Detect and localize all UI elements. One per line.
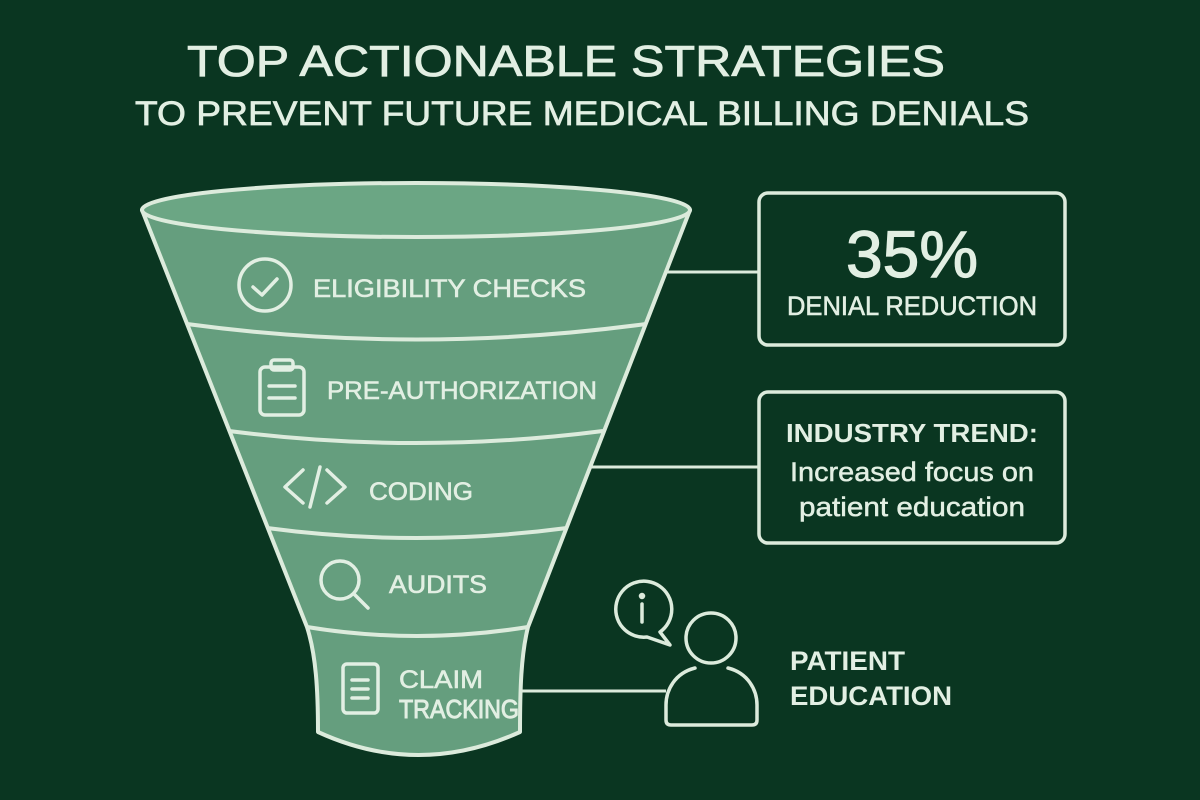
band labels: ELIGIBILITY CHECKS [313,275,586,303]
box: 35% denial reduction [759,193,1065,345]
band labels [313,275,597,724]
title: TOP ACTIONABLE STRATEGIES [187,37,945,86]
box: industry trend: Increased focus on [790,457,1034,487]
band labels: CODING [369,478,473,506]
title: TO PREVENT FUTURE MEDICAL BILLING DENIALS [135,95,1029,133]
patient education label [790,646,952,711]
box: 35% denial reduction: 35% [846,217,978,291]
box: industry trend: INDUSTRY TREND: [786,418,1038,448]
icon: person with info bubble [616,581,757,725]
box: industry trend: patient education [799,492,1025,522]
patient education label: EDUCATION [790,681,952,711]
box: 35% denial reduction: DENIAL REDUCTION [787,291,1037,321]
band labels: AUDITS [389,571,487,599]
funnel [142,183,690,755]
box: industry trend [759,392,1065,543]
band labels: TRACKING [399,694,519,724]
connector lines [520,272,760,691]
band labels: PRE-AUTHORIZATION [327,377,597,405]
title [135,37,1029,133]
icons in funnel [239,259,378,713]
patient education label: PATIENT [790,646,906,676]
band labels: CLAIM [399,666,483,694]
